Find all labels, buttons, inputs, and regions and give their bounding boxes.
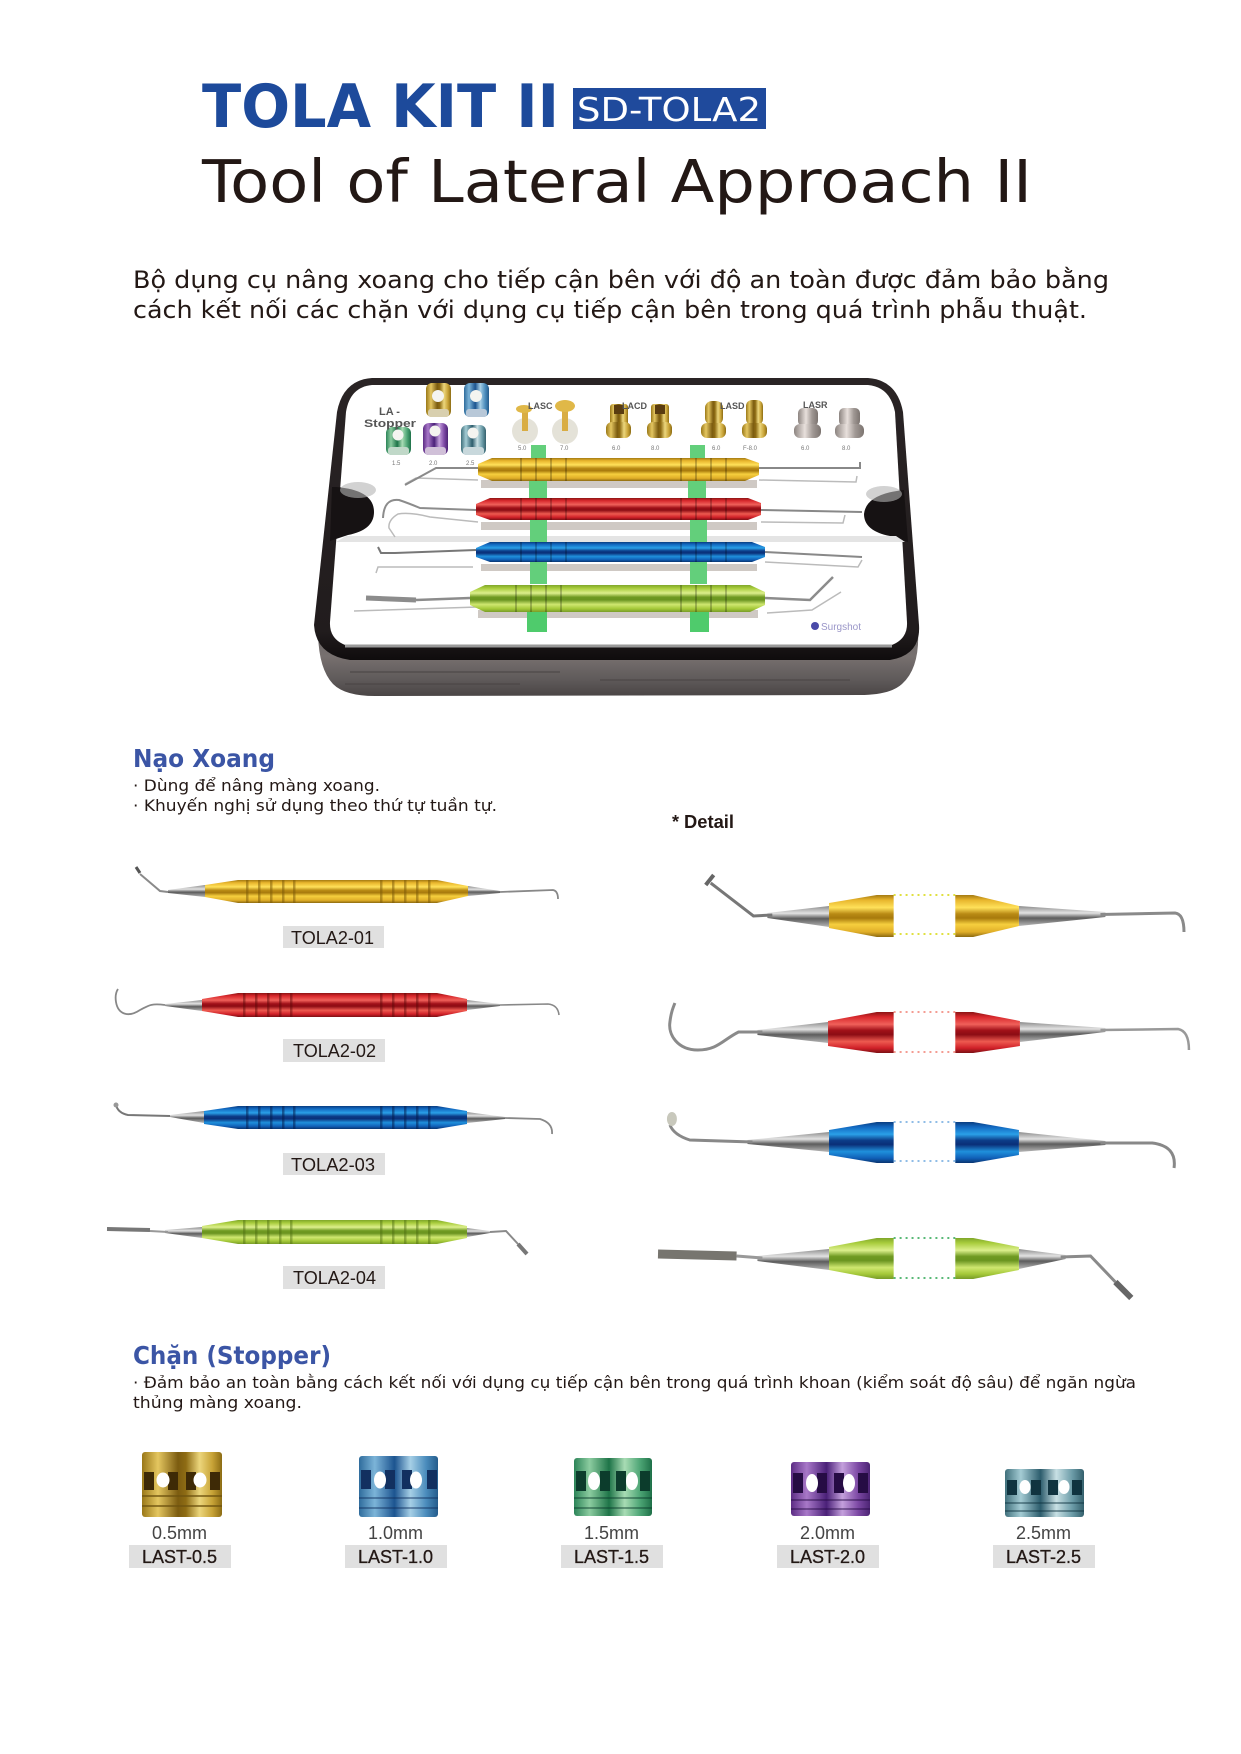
stopper label 2.5mm: LAST-2.5 bbox=[1006, 1547, 1081, 1567]
stopper label 2.0mm bbox=[777, 1523, 879, 1568]
tray rim bbox=[314, 378, 919, 660]
stopper description: thủng màng xoang. bbox=[133, 1393, 302, 1412]
stopper label 1.5mm: LAST-1.5 bbox=[574, 1547, 649, 1567]
detail heading: Detail bbox=[684, 812, 734, 832]
stopper label 1.5mm bbox=[561, 1523, 663, 1568]
stopper 2.5mm bbox=[1005, 1469, 1084, 1517]
drill stops LASR bbox=[794, 408, 864, 438]
stopper label 1.0mm: 1.0mm bbox=[368, 1523, 423, 1543]
stopper 2.0mm bbox=[791, 1462, 870, 1516]
tray labels bbox=[364, 400, 851, 467]
stopper description: · Đảm bảo an toàn bằng cách kết nối với dụng cụ tiếp cận bên trong quá trình khoan (kiểm soát độ sâu) để ngăn ngừa bbox=[133, 1373, 1136, 1392]
tray labels: 6.0 bbox=[612, 446, 621, 452]
instrument shadows bbox=[354, 476, 862, 613]
tray labels: 6.0 bbox=[801, 446, 810, 452]
tray labels: 2.0 bbox=[429, 461, 438, 467]
detail heading: * bbox=[672, 812, 679, 832]
stopper label 0.5mm: 0.5mm bbox=[152, 1523, 207, 1543]
tray labels: 6.0 bbox=[712, 446, 721, 452]
tray labels: LASD bbox=[720, 401, 745, 411]
intro text: cách kết nối các chặn với dụng cụ tiếp cận bên trong quá trình phẫu thuật. bbox=[133, 295, 1087, 324]
tray labels: LACD bbox=[622, 401, 647, 411]
blue tray instrument bbox=[378, 542, 862, 562]
green tray instrument bbox=[366, 577, 833, 612]
detail instrument: green bbox=[658, 1238, 1131, 1298]
section bullets: · Khuyến nghị sử dụng theo thứ tự tuần tự. bbox=[133, 796, 497, 815]
drill stops LACD bbox=[606, 404, 672, 438]
stopper label 1.5mm: 1.5mm bbox=[584, 1523, 639, 1543]
instrument: TOLA2-04 bbox=[107, 1220, 527, 1254]
gold tray instrument bbox=[405, 458, 860, 485]
green retaining bands bbox=[527, 445, 709, 632]
stopper label 0.5mm: LAST-0.5 bbox=[142, 1547, 217, 1567]
stopper 1.5mm bbox=[574, 1458, 652, 1516]
stopper label 2.5mm bbox=[993, 1523, 1095, 1568]
detail instrument: blue bbox=[667, 1112, 1174, 1168]
stopper label 2.5mm: 2.5mm bbox=[1016, 1523, 1071, 1543]
intro text bbox=[133, 265, 1109, 324]
right notch bbox=[864, 490, 908, 542]
tray labels: 8.0 bbox=[651, 446, 660, 452]
detail instrument: red bbox=[670, 1003, 1189, 1053]
tray labels: 5.0 bbox=[518, 446, 527, 452]
instrument: TOLA2-01 bbox=[136, 867, 558, 903]
label TOLA2-01: TOLA2-01 bbox=[291, 928, 374, 948]
instrument: TOLA2-03 bbox=[114, 1102, 552, 1134]
intro text: Bộ dụng cụ nâng xoang cho tiếp cận bên với độ an toàn được đảm bảo bằng bbox=[133, 265, 1109, 294]
tray labels: 8.0 bbox=[842, 446, 851, 452]
surgshot logo: Surgshot bbox=[821, 622, 861, 633]
drill stops LASD bbox=[701, 400, 767, 438]
tray labels: LASC bbox=[528, 401, 553, 411]
kit photo: instrument tray bbox=[314, 378, 919, 696]
stopper label 0.5mm bbox=[129, 1523, 231, 1568]
tray labels: 1.5 bbox=[392, 461, 401, 467]
tray labels: Stopper bbox=[364, 418, 417, 430]
stopper 0.5mm bbox=[142, 1452, 222, 1517]
tray labels: LA - bbox=[379, 406, 400, 418]
tray white insert bbox=[330, 385, 907, 647]
grooves on tray handles bbox=[515, 458, 727, 612]
stopper label 1.0mm bbox=[345, 1523, 447, 1568]
left notch bbox=[330, 487, 374, 541]
stopper label 2.0mm: 2.0mm bbox=[800, 1523, 855, 1543]
stopper label 2.0mm: LAST-2.0 bbox=[790, 1547, 865, 1567]
title: TOLA KIT II: TOLA KIT II bbox=[202, 72, 559, 142]
product code badge: SD-TOLA2 bbox=[577, 90, 761, 129]
subtitle: Tool of Lateral Approach II bbox=[201, 147, 1032, 216]
tray labels: 7.0 bbox=[560, 446, 569, 452]
section heading: Chặn (Stopper): Chặn (Stopper) bbox=[133, 1341, 331, 1370]
section bullets: · Dùng để nâng màng xoang. bbox=[133, 776, 380, 795]
label TOLA2-02: TOLA2-02 bbox=[293, 1041, 376, 1061]
stopper label 1.0mm: LAST-1.0 bbox=[358, 1547, 433, 1567]
tray labels: LASR bbox=[803, 400, 828, 410]
tray labels: F-8.0 bbox=[743, 446, 758, 452]
detail instrument: gold bbox=[706, 875, 1184, 937]
tray labels: 2.5 bbox=[466, 461, 475, 467]
label TOLA2-03: TOLA2-03 bbox=[291, 1155, 375, 1175]
section heading: Nạo Xoang: Nạo Xoang bbox=[133, 744, 275, 773]
stopper description bbox=[133, 1373, 1136, 1412]
tray base bbox=[318, 630, 918, 696]
red tray instrument bbox=[383, 498, 862, 520]
section bullets bbox=[133, 776, 497, 815]
label TOLA2-04: TOLA2-04 bbox=[293, 1268, 376, 1288]
stopper holders bbox=[386, 383, 489, 455]
drill stops LASC bbox=[512, 400, 578, 444]
instrument: TOLA2-02 bbox=[116, 989, 559, 1017]
stopper 1.0mm bbox=[359, 1456, 438, 1517]
